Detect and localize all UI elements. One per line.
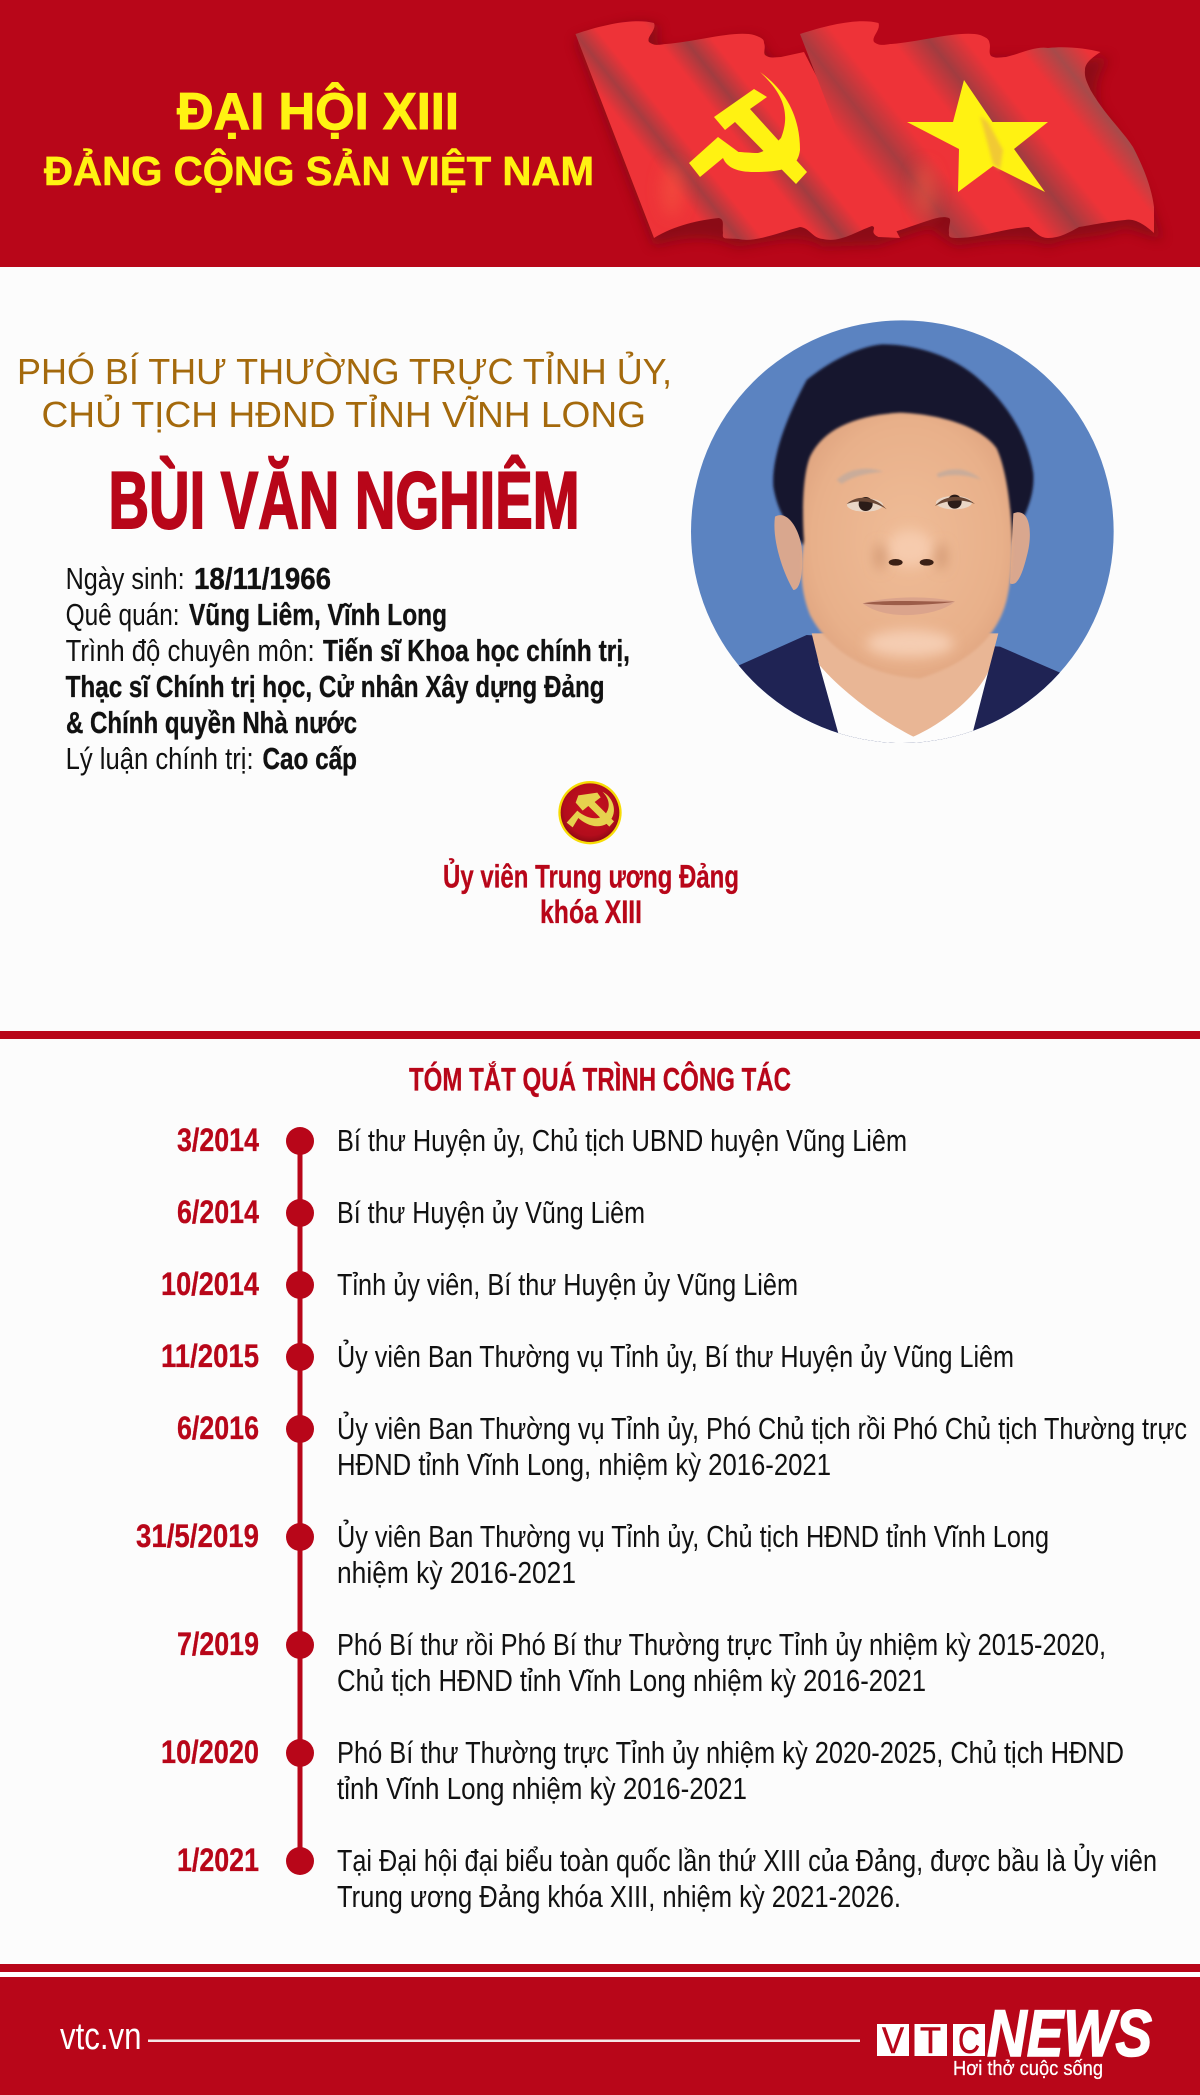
entry 31/5/2019: 31/5/2019 xyxy=(136,1518,259,1554)
personal details: Thạc sĩ Chính trị học, Cử nhân Xây dựng Đảng xyxy=(66,669,605,704)
personal details: Tiến sĩ Khoa học chính trị, xyxy=(323,633,630,668)
entry 10/2020: 10/2020 xyxy=(161,1734,259,1770)
entry 6/2014 xyxy=(177,1194,645,1230)
logo: VTC News: V xyxy=(882,2020,904,2061)
logo: VTC News xyxy=(877,1996,1152,2080)
party emblem badge xyxy=(558,781,622,844)
hammer xyxy=(576,793,614,827)
entry 7/2019: Chủ tịch HĐND tỉnh Vĩnh Long nhiệm kỳ 2016-2021 xyxy=(337,1663,926,1698)
entry 10/2020 xyxy=(161,1734,1124,1806)
entry 11/2015 xyxy=(161,1338,1014,1374)
entry 7/2019 xyxy=(177,1626,1106,1698)
personal details xyxy=(66,561,630,776)
entry 11/2015: 11/2015 xyxy=(161,1338,259,1374)
personal details: Vũng Liêm, Vĩnh Long xyxy=(189,597,447,632)
ears xyxy=(774,512,1030,590)
hair xyxy=(773,344,1034,553)
entry 1/2021 xyxy=(177,1842,1157,1914)
portrait photo xyxy=(691,320,1114,748)
sickle xyxy=(567,792,614,827)
header banner xyxy=(0,0,1200,267)
neck xyxy=(812,633,998,737)
chin highlight xyxy=(867,630,953,657)
heading: Đại hội XIII: ĐẠI HỘI XIII xyxy=(177,82,459,141)
entry 3/2014 xyxy=(177,1122,907,1158)
entry 31/5/2019: Ủy viên Ban Thường vụ Tỉnh ủy, Chủ tịch HĐND tỉnh Vĩnh Long xyxy=(337,1518,1049,1554)
title block: position xyxy=(17,350,672,435)
title block: position: PHÓ BÍ THƯ THƯỜNG TRỰC TỈNH ỦY, xyxy=(17,350,672,392)
flag: yellow star xyxy=(800,21,1154,238)
entry 6/2014: 6/2014 xyxy=(177,1194,259,1230)
website label: vtc.vn xyxy=(60,2016,142,2058)
suit xyxy=(738,635,1060,747)
logo: VTC News: C xyxy=(958,2020,980,2061)
personal details: Quê quán: xyxy=(66,597,180,632)
personal details: Cao cấp xyxy=(262,741,357,776)
flag: hammer and sickle xyxy=(576,21,900,240)
entry 31/5/2019: nhiệm kỳ 2016-2021 xyxy=(337,1555,576,1590)
entry 3/2014: 3/2014 xyxy=(177,1122,259,1158)
section divider xyxy=(0,1031,1200,1039)
section heading: TÓM TẮT QUÁ TRÌNH CÔNG TÁC xyxy=(409,1062,791,1098)
entry 1/2021: Trung ương Đảng khóa XIII, nhiệm kỳ 2021-2026. xyxy=(337,1879,901,1914)
sickle xyxy=(689,72,800,177)
entry 6/2016: 6/2016 xyxy=(177,1410,259,1446)
flags xyxy=(575,21,1162,247)
central committee label: Ủy viên Trung ương Đảng xyxy=(443,858,739,894)
eyes xyxy=(847,498,883,512)
personal details: Lý luận chính trị: xyxy=(66,741,254,776)
career timeline xyxy=(136,1122,1187,1914)
hammer xyxy=(714,89,807,184)
shirt xyxy=(818,662,988,748)
footer xyxy=(0,1964,1200,2095)
entry 10/2014: Tỉnh ủy viên, Bí thư Huyện ủy Vũng Liêm xyxy=(337,1267,798,1302)
face xyxy=(801,413,1012,678)
personal details: Trình độ chuyên môn: xyxy=(66,633,315,668)
entry 7/2019: 7/2019 xyxy=(177,1626,259,1662)
entry 31/5/2019 xyxy=(136,1518,1049,1590)
entry 6/2016 xyxy=(177,1410,1187,1482)
personal details: 18/11/1966 xyxy=(194,561,331,596)
personal details: Ngày sinh: xyxy=(66,561,185,596)
logo: VTC News: T xyxy=(920,2020,941,2061)
timeline axis xyxy=(298,1141,302,1861)
entry 3/2014: Bí thư Huyện ủy, Chủ tịch UBND huyện Vũng Liêm xyxy=(337,1123,907,1158)
central committee label xyxy=(443,858,739,930)
entry 6/2014: Bí thư Huyện ủy Vũng Liêm xyxy=(337,1195,645,1230)
personal details: & Chính quyền Nhà nước xyxy=(66,705,357,740)
entry 11/2015: Ủy viên Ban Thường vụ Tỉnh ủy, Bí thư Huyện ủy Vũng Liêm xyxy=(337,1338,1014,1374)
central committee label: khóa XIII xyxy=(540,894,642,930)
title block: position: CHỦ TỊCH HĐND TỈNH VĨNH LONG xyxy=(42,393,646,435)
entry 10/2014: 10/2014 xyxy=(161,1266,259,1302)
name: BÙI VĂN NGHIÊM xyxy=(108,454,580,546)
mouth xyxy=(863,597,955,615)
logo: VTC News: NEWS xyxy=(987,1996,1152,2070)
eyebrows xyxy=(837,469,982,484)
nose xyxy=(875,530,946,570)
entry 6/2016: HĐND tỉnh Vĩnh Long, nhiệm kỳ 2016-2021 xyxy=(337,1447,831,1482)
heading: Đảng Cộng sản Việt Nam: ĐẢNG CỘNG SẢN VIỆT NAM xyxy=(44,148,594,194)
entry 1/2021: 1/2021 xyxy=(177,1842,259,1878)
entry 10/2014 xyxy=(161,1266,798,1302)
entry 10/2020: tỉnh Vĩnh Long nhiệm kỳ 2016-2021 xyxy=(337,1771,747,1806)
tagline: Hơi thở cuộc sống xyxy=(953,2058,1103,2080)
star xyxy=(907,80,1048,192)
